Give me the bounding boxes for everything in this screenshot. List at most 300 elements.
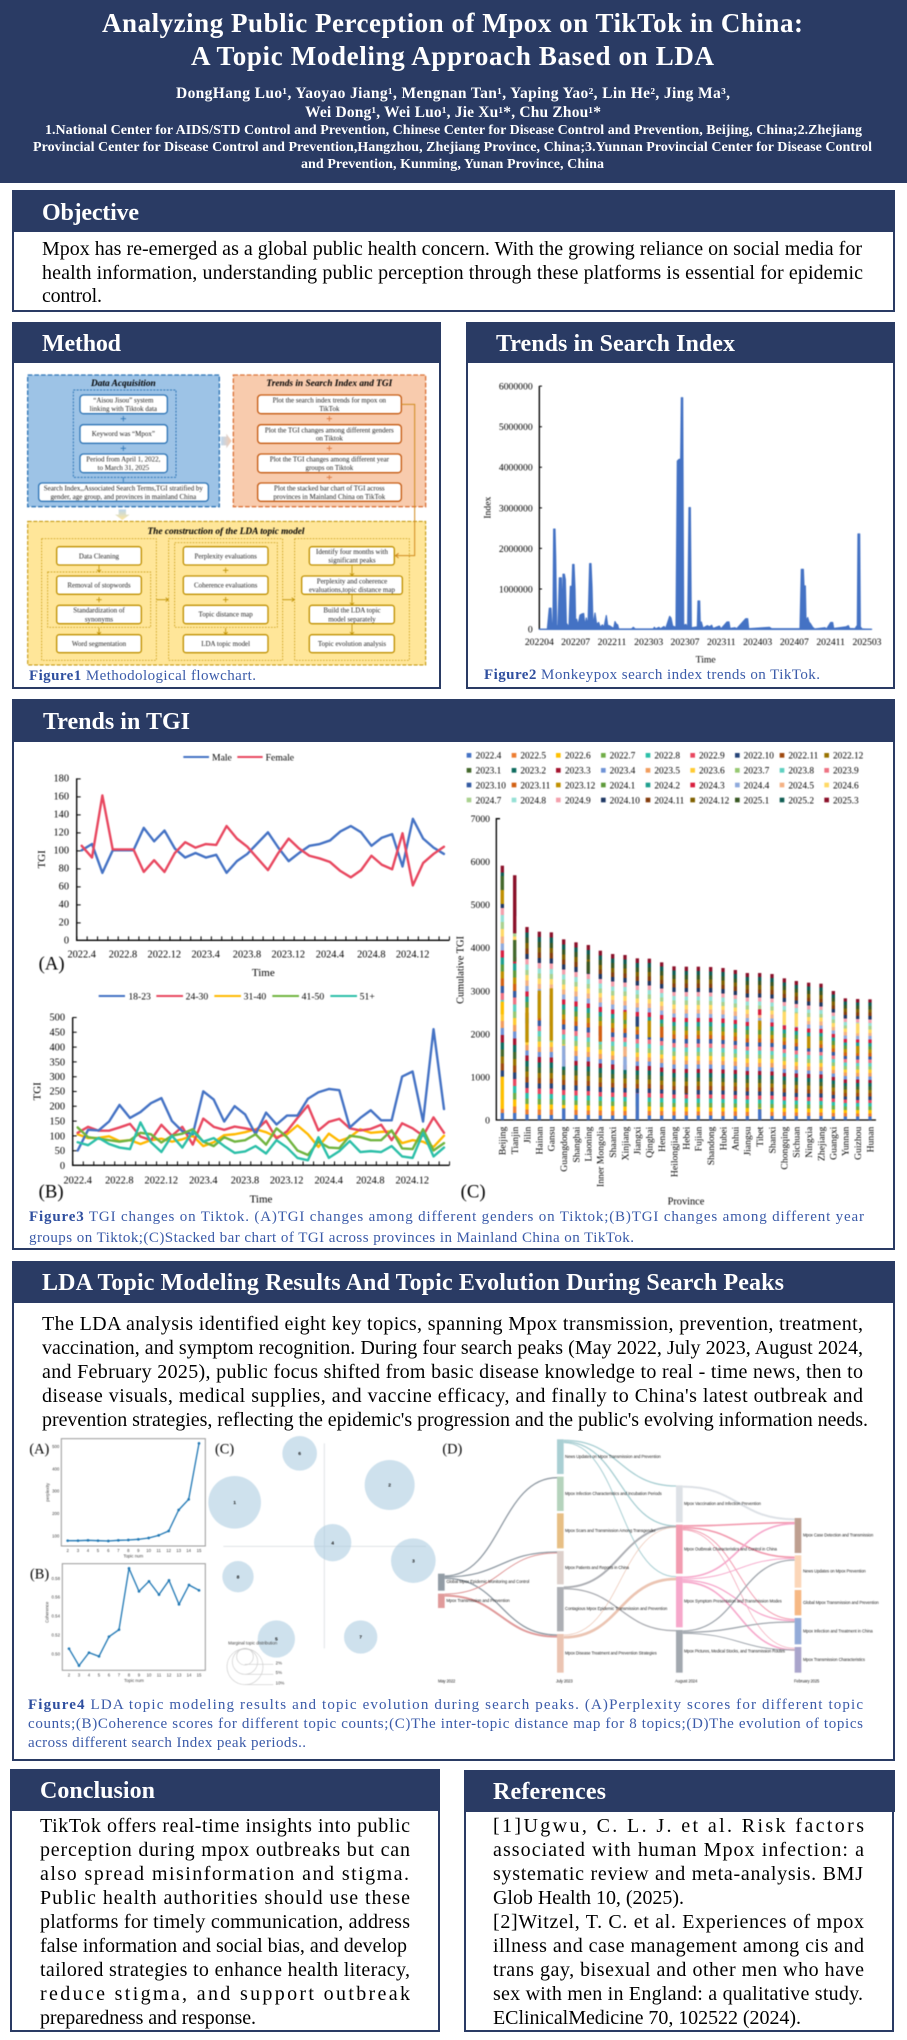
panel: trends in search index [466,322,895,688]
label (C): (C) [461,1181,486,1202]
sankey labels: Global Mpox Epidemic Monitoring and Control [446,1579,529,1584]
affiliations [33,123,872,172]
large bar segments [501,875,859,1120]
references text: trans gay, bisexual and other men who have [493,1959,864,1981]
x axis: 202311 [707,637,736,648]
axes C: Cumulative TGI [455,936,466,1004]
legend C: 2023.11 [520,781,551,791]
legend C: 2022.5 [520,752,546,762]
data acquisition block: Period from April 1, 2022, [86,456,161,464]
caption: figure 3 [29,1209,864,1246]
axes B: 2022.4 [63,1175,92,1186]
data acquisition block: “Aisou Jisou” system [93,397,154,405]
panel: trends in TGI [12,699,895,1249]
chart A: perplexity: 3 [77,1548,80,1553]
chart C: inter-topic distance map: (C) [215,1441,234,1457]
province labels: Anhui [731,1126,742,1151]
axes C: Province [668,1196,705,1207]
conclusion text: TikTok offers real-time insights into public [40,1815,410,1837]
province labels: Fujian [694,1127,705,1151]
chart A: gender TGI [36,753,450,979]
panel: method [12,322,441,688]
LDA block: LDA topic model [201,640,250,648]
chart B: coherence: Topic num [124,1678,144,1683]
conclusion text: platforms for timely communication, address [40,1911,410,1933]
x axis: 202211 [598,637,626,648]
chart A: perplexity: 14 [186,1548,192,1553]
data acquisition block [28,375,219,507]
LDA block: Removal of stopwords [67,582,131,590]
axes A: 2022.12 [148,949,181,960]
data acquisition block: linking with Tiktok data [90,405,157,413]
axes B: 50 [55,1146,65,1157]
sankey labels: Mpox Pictures, Medical Stocks, and Transmission Routes [684,1648,785,1653]
x axis: 202207 [561,637,590,648]
references text [493,1815,864,2029]
province labels: Beijing [498,1126,509,1155]
y axis: Index [483,497,494,519]
legend C: 2023.10 [476,781,506,791]
axes B: TGI [31,1082,43,1100]
chart B: coherence: 5 [98,1673,101,1678]
axes A: 140 [53,810,69,821]
x axis: 202303 [634,637,663,648]
axes A [36,774,450,979]
sankey labels: Mpox Patients and Reports in China [565,1565,630,1570]
caption: figure 4: counts;(B)Coherence scores for different topic counts;(C)The inter-topic distance map for 8 topics;(D)The evolution of topics [28,1716,863,1732]
chart A: perplexity: 500 [52,1444,60,1449]
province labels: Shanghai [571,1126,582,1163]
sankey labels: Global Mpox Transmission and Prevention [803,1600,879,1605]
LDA block: Identify four months with [316,548,388,556]
heading: objective: Objective [42,200,139,226]
chart A: perplexity: 10 [146,1548,152,1553]
conclusion text: false information and social bias, and develop [40,1935,407,1957]
sankey labels: Contagious Mpox Epidemic Transmission and Prevention [565,1606,668,1611]
chart B: coherence: 14 [187,1673,192,1678]
sankey labels: Mpox Outbreak Characteristics and Control in China [684,1546,778,1551]
trends block: provinces in Mainland China on TikTok [273,493,386,501]
legend C: 2023.9 [833,767,859,777]
LDA block: Perplexity evaluations [195,552,257,560]
province labels: Liaoning [584,1127,595,1162]
trends block: groups on Tiktok [305,464,354,472]
LDA block: Word segmentation [72,640,127,648]
legend C: 2022.12 [833,752,864,762]
legend C: 2022.10 [744,752,774,762]
LDA block: Build the LDA topic [323,607,381,615]
province labels: Guangdong [559,1126,570,1172]
trends block [233,375,426,507]
LDA block: Topic evolution analysis [318,640,386,648]
chart B: coherence: (B) [30,1566,49,1582]
province labels: Hainan [535,1126,546,1155]
stacked bars [501,866,872,1120]
conclusion text [40,1815,410,2029]
sankey labels: News Updates on Mpox Prevention [803,1569,866,1574]
caption: figure 2: Figure2 Monkeypox search index trends on TikTok. [484,667,820,683]
legend C: 2023.5 [654,767,680,777]
chart A: perplexity: (A) [29,1441,49,1457]
axes A: Time [252,967,275,979]
legend C: 2023.3 [565,767,591,777]
heading: LDA results: LDA Topic Modeling Results And Topic Evolution During Search Peaks [42,1270,784,1296]
chart B: coherence: 0.54 [52,1614,61,1619]
y axis: 5000000 [499,422,533,433]
axes C: 1000 [471,1072,490,1083]
y axis: 1000000 [499,585,533,596]
chart B: coherence: 4 [88,1673,91,1678]
axes B: 350 [49,1057,65,1068]
axes C: 7000 [471,814,490,825]
legend C: 2024.2 [654,781,680,791]
references text: illness and case management among cis and [493,1935,864,1957]
chart A: perplexity: 11 [156,1548,162,1553]
legend B [99,992,375,1003]
data acquisition block: gender, age group, and provinces in mainland China [50,493,196,501]
conclusion text: Public health authorities should use these [40,1887,410,1909]
province labels: Tianjin [510,1127,521,1154]
header banner [0,0,907,183]
axes B: 100 [49,1131,65,1142]
axes B: 2024.8 [356,1175,385,1186]
province labels: Heilongjiang [669,1126,680,1177]
size legend [227,1640,284,1686]
axes A: 2023.8 [233,949,261,960]
province labels: Zhejiang [816,1126,827,1161]
sankey links [445,1440,795,1650]
axes A: 2024.12 [396,949,429,960]
legend C [467,752,864,806]
axes B: 2024.4 [314,1175,343,1186]
legend B: 18-23 [128,992,151,1003]
flowchart [28,375,426,665]
caption: figure 1: Figure1 Methodological flowchart. [29,668,256,684]
axes B: 2022.8 [105,1175,134,1186]
trends block: Plot the search index trends for mpox on [273,397,387,405]
panel: conclusion [10,1769,440,2031]
sankey labels: Mpox Transmission and Prevention [446,1598,510,1603]
references text: sex with men in England: a qualitative study. [493,1983,863,2005]
LDA text: disease visuals, medical supplies, and vaccine efficacy, and finally to China's latest outbreak and [42,1385,863,1407]
legend C: 2024.8 [520,796,546,806]
LDA text: The LDA analysis identified eight key topics, spanning Mpox transmission, prevention, treatment, [42,1313,863,1335]
sankey labels: Mpox Symptom Presentation and Transmission Modes [684,1599,782,1604]
trends block: Plot the TGI changes among different year [270,456,390,464]
y axis: 3000000 [499,503,533,514]
heading: conclusion: Conclusion [40,1778,155,1804]
axes B: 2022.12 [145,1175,178,1186]
chart A: perplexity: Topic num [123,1553,144,1558]
sankey period labels [438,1679,820,1684]
references text: [2]Witzel, T. C. et al. Experiences of mpox [493,1911,864,1933]
chart A: perplexity: 13 [176,1548,182,1553]
axes C: 3000 [471,986,490,997]
province labels: Shandong [706,1126,717,1165]
LDA block [28,521,426,665]
province labels [498,1126,876,1187]
chart A: perplexity: 7 [117,1548,120,1553]
province labels: Hubei [718,1126,729,1150]
trends block: Plot the TGI changes among different genders [265,426,394,434]
province labels: Gansu [547,1127,558,1151]
y axis: 4000000 [499,463,533,474]
axes A: 80 [59,864,69,875]
x axis: 202503 [853,637,882,648]
axes A: 2023.4 [191,949,220,960]
chart A: perplexity: 300 [52,1489,60,1494]
axes B: 150 [49,1116,65,1127]
chart B: coherence: 2 [68,1673,71,1678]
conclusion text: perception during mpox outbreaks but can [40,1839,410,1861]
legend C: 2023.6 [699,767,725,777]
axes B: 2024.12 [396,1175,429,1186]
LDA block: Coherence evaluations [194,582,258,590]
sankey labels: Mpox Infection and Treatment in China [803,1628,873,1633]
axes A: 2022.4 [67,949,96,960]
axes A: 180 [53,774,69,785]
chart C: inter-topic distance map [208,1436,436,1686]
references text: Glob Health 10, (2025). [493,1887,684,1909]
y axis [483,381,541,636]
label (A): (A) [39,953,65,974]
heading: method: Method [42,331,122,357]
legend A [183,753,294,764]
axes C: 0 [485,1115,490,1126]
legend C: 2025.2 [788,796,814,806]
sankey labels [446,1454,879,1662]
legend C: 2024.6 [833,781,859,791]
chart C: stacked bars by province [455,752,876,1207]
size legend: 10% [276,1681,284,1686]
legend C: 2024.1 [610,781,636,791]
province labels: Hebei [682,1126,693,1150]
legend C: 2022.9 [699,752,725,762]
authors [176,85,730,121]
trends block: on Tiktok [316,435,343,443]
sankey period labels: May 2022 [438,1679,456,1684]
province labels: Chongqing [780,1126,791,1170]
axes B: 450 [49,1028,65,1039]
chart B: coherence: 8 [128,1673,131,1678]
axes C: 2000 [471,1029,490,1040]
legend B: 51+ [360,992,375,1003]
province labels: Inner Mongolia [596,1126,607,1187]
x axis: Time [696,654,716,665]
references text: [1]Ugwu, C. L. J. et al. Risk factors [493,1815,864,1837]
province labels: Hunan [865,1126,876,1152]
objective text [42,238,863,307]
chart A: perplexity: 2 [66,1548,69,1553]
x axis: 202407 [780,637,809,648]
sankey labels: Mpox Vaccination and Infection Prevention [684,1501,762,1506]
legend C: 2022.4 [476,752,502,762]
chart C: inter-topic distance map: 5 [275,1637,278,1643]
data series [539,398,872,629]
legend C: 2024.7 [476,796,502,806]
legend B: 24-30 [186,992,208,1003]
chart A: perplexity: 6 [107,1548,110,1553]
x axis: 202411 [816,637,845,648]
axes C: 5000 [471,900,490,911]
size legend: Marginal topic distribution [228,1640,278,1645]
province labels: Jilin [522,1126,533,1143]
sankey labels: Mpox Case Detection and Transmission [803,1533,874,1538]
legend C: 2024.3 [699,781,725,791]
axes C: 6000 [471,857,490,868]
province labels: Qinghai [645,1126,656,1158]
legend C: 2024.4 [744,781,770,791]
trends block: TikTok [319,405,340,413]
LDA block: Topic distance map [199,611,253,619]
axes B: 2023.4 [189,1175,218,1186]
axes A: 2024.8 [357,949,386,960]
trends block: Plot the stacked bar chart of TGI across [274,485,385,493]
references text: systematic review and meta-analysis. BMJ [493,1863,863,1885]
data acquisition block: Data Acquisition [90,379,156,389]
axes B: 2023.12 [270,1175,303,1186]
LDA text: vaccination, and symptom recognition. During four search peaks (May 2022, July 2023, August 2024, [42,1337,863,1359]
chart A: perplexity: 15 [197,1548,202,1553]
conclusion text: tailored strategies to enhance health literacy, [40,1959,410,1981]
sankey period labels: August 2024 [675,1679,698,1684]
caption: figure 3: groups on Tiktok;(C)Stacked bar chart of TGI across provinces in Mainland China on TikTok. [29,1230,634,1246]
series B [78,1029,444,1160]
heading: trends in TGI: Trends in TGI [43,709,190,735]
references text: EClinicalMedicine 70, 102522 (2024). [493,2007,801,2029]
chart A: perplexity: 4 [87,1548,90,1553]
arrow: to LDA block [115,509,130,520]
LDA block: Perplexity and coherence [317,577,387,585]
LDA block: significant peaks [328,557,376,565]
affiliations: Provincial Center for Disease Control and Prevention,Hangzhou, Zhejiang Province, China;3.Yunnan Provincial Center for Disease Control [33,140,872,155]
legend C: 2022.11 [788,752,819,762]
chart A: perplexity: 5 [97,1548,100,1553]
LDA block: Standardization of [73,607,125,615]
chart B: coherence: 0.52 [52,1632,61,1637]
legend C: 2023.8 [788,767,814,777]
sankey labels: Mpox Transmission Characteristics [803,1657,865,1662]
axes B: 250 [49,1087,65,1098]
chart C: inter-topic distance map: 7 [359,1635,362,1641]
x axis: 202204 [525,637,554,648]
legend B: 41-50 [302,992,324,1003]
province labels: Jiangxi [633,1126,644,1155]
axes A: 2022.8 [109,949,137,960]
legend A: Male [212,753,232,764]
size legend: 2% [276,1660,282,1665]
LDA block: model separately [328,616,376,624]
axes A: 60 [59,882,69,893]
LDA text: and February 2025), public focus shifted from basic disease knowledge to real - time news, then to [42,1361,863,1383]
sankey nodes [438,1439,801,1673]
province labels: Henan [657,1126,668,1152]
chart B: coherence: 10 [147,1673,152,1678]
province labels: Yunnan [841,1127,852,1156]
legend C: 2024.11 [654,796,685,806]
LDA block: synonyms [85,616,113,624]
province labels: Guizhou [853,1127,864,1160]
province labels: Xinjiang [620,1126,631,1160]
legend C: 2023.4 [610,767,636,777]
axes B: Time [250,1194,273,1206]
affiliations: and Prevention, Kunming, Yunan Province, China [301,157,604,172]
chart B: coherence: 11 [157,1673,162,1678]
province labels: Ningxia [804,1126,815,1158]
authors: Wei Dong¹, Wei Luo¹, Jie Xu¹*, Chu Zhou¹* [305,104,601,121]
chart C: inter-topic distance map: 4 [331,1540,334,1546]
panel: references [464,1770,895,2031]
axes A: 40 [59,900,69,911]
heading: trends in search index: Trends in Search Index [496,331,735,357]
chart B: age group TGI [31,992,450,1206]
legend A: Female [266,753,294,764]
legend C: 2025.3 [833,796,859,806]
caption: figure 4: across different search Index peak periods.. [28,1735,306,1751]
province labels: Sichuan [792,1126,803,1158]
legend C: 2025.1 [744,796,770,806]
chart B: coherence [30,1564,205,1683]
chart A: perplexity: 100 [52,1533,60,1538]
LDA text [42,1313,868,1431]
chart B: coherence: 0.50 [52,1651,61,1656]
y axis: 2000000 [499,544,533,555]
axes C: 4000 [471,943,490,954]
arrow: to trends block [221,434,232,448]
chart C: inter-topic distance map: 3 [412,1558,415,1564]
axes B [31,1013,450,1206]
size legend: 5% [276,1670,282,1675]
panel: objective [12,190,895,311]
axes A: 2024.4 [316,949,344,960]
legend C: 2022.7 [610,752,636,762]
chart B: coherence: Coherence [45,1601,50,1623]
axes C [455,814,876,1207]
axes A: 160 [53,792,69,803]
chart A: perplexity: 12 [166,1548,172,1553]
sankey period labels: July 2023 [556,1679,573,1684]
chart C: inter-topic distance map: 1 [233,1500,236,1506]
caption: figure 4 [28,1697,863,1751]
province labels: Tibet [755,1126,766,1147]
chart C: inter-topic distance map: 8 [237,1574,240,1580]
legend C: 2022.6 [565,752,591,762]
sankey labels: News Updates on Mpox Transmission and Prevention [565,1454,661,1459]
data acquisition block: to March 31, 2025 [98,464,150,472]
x axis: 202307 [671,637,700,648]
legend C: 2024.9 [565,796,591,806]
axes B: 300 [49,1072,65,1083]
affiliations: 1.National Center for AIDS/STD Control and Prevention, Chinese Center for Disease Control and Prevention, Beijing, China;2.Zhejiang [45,123,862,138]
LDA block: evaluations,topic distance map [309,586,395,594]
sankey labels: Mpox Infection Characteristics and Incubation Periods [565,1491,662,1496]
axes B: 2023.8 [231,1175,259,1186]
LDA block: Data Cleaning [79,552,120,560]
objective text: Mpox has re-emerged as a global public health concern. With the growing reliance on social media for [42,238,862,260]
legend C: 2022.8 [654,752,680,762]
LDA block: The construction of the LDA topic model [147,527,305,537]
title [102,8,803,71]
chart B: coherence: 9 [138,1673,141,1678]
panel: LDA topic modeling results [12,1261,895,1760]
chart A: perplexity: 8 [127,1548,130,1553]
y axis: 0 [528,625,533,636]
axes A: 0 [64,936,69,947]
chart A: perplexity [29,1439,205,1558]
chart B: coherence: 0.56 [52,1595,61,1600]
legend B: 31-40 [244,992,266,1003]
axes B: 200 [49,1102,65,1113]
